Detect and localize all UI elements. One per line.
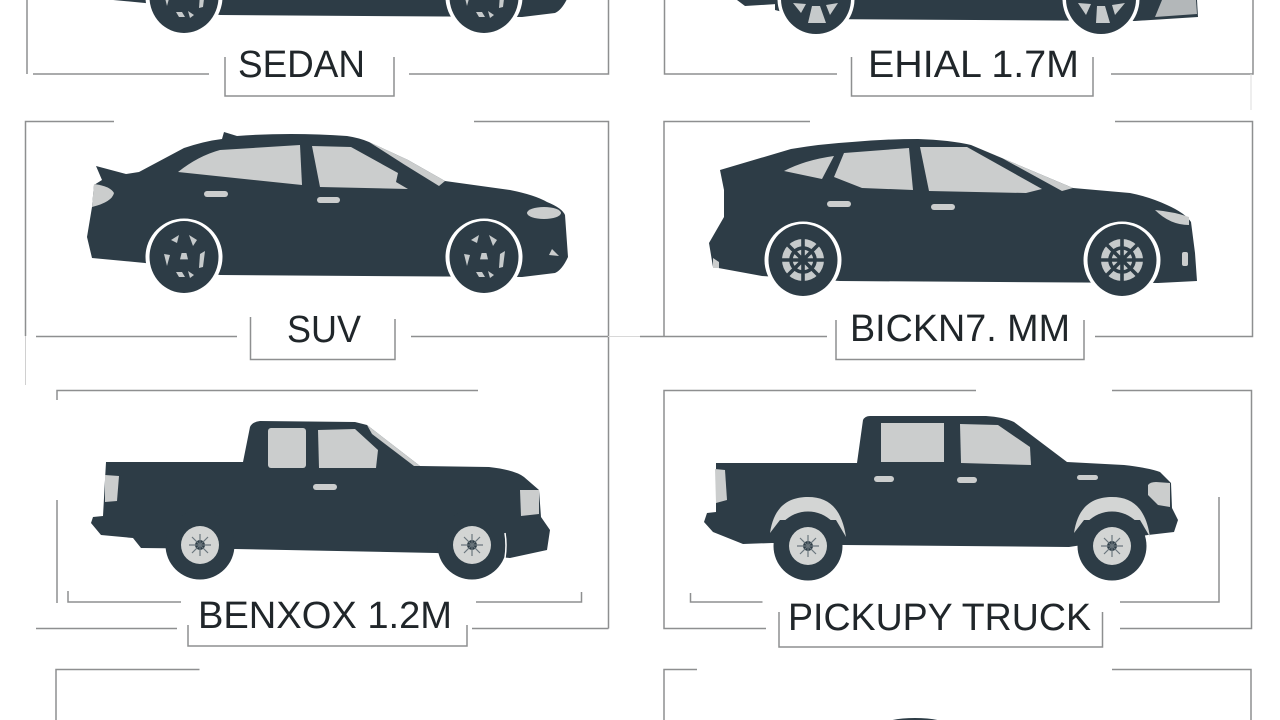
panel: bottom right cropped xyxy=(664,670,1251,720)
panel: crossover xyxy=(640,122,1252,360)
vehicle: crossover silhouette xyxy=(709,139,1197,298)
label box: crew cab pickup xyxy=(779,612,1102,647)
label: PICKUPY TRUCK: PICKUPY TRUCK xyxy=(788,597,1091,639)
vehicle: roof of cropped car xyxy=(883,718,947,720)
label box: crossover xyxy=(836,320,1084,360)
label box: sedan xyxy=(225,57,394,96)
panel: extended cab pickup xyxy=(36,390,608,646)
vehicle: partially cropped car xyxy=(737,0,1198,38)
label: SUV: SUV xyxy=(287,309,362,351)
label box: extended cab pickup xyxy=(188,625,467,646)
label box: coupe xyxy=(852,57,1093,96)
label: BICKN7. MM: BICKN7. MM xyxy=(850,308,1070,350)
panel: coupe xyxy=(664,0,1253,110)
label box: SUV xyxy=(250,317,395,360)
vehicle: extended cab pickup silhouette xyxy=(91,421,550,580)
panel: SUV xyxy=(26,122,664,628)
label: SEDAN: SEDAN xyxy=(238,44,365,86)
panel: bottom left cropped xyxy=(56,670,200,720)
panel: crew cab pickup xyxy=(664,390,1252,647)
label: EHIAL 1.7M: EHIAL 1.7M xyxy=(868,44,1079,86)
vehicle: SUV silhouette xyxy=(87,132,568,296)
vehicle: sedan silhouette xyxy=(87,0,568,36)
label: BENXOX 1.2M: BENXOX 1.2M xyxy=(198,595,452,637)
vehicle: crew cab pickup silhouette xyxy=(704,416,1178,580)
panel: sedan xyxy=(27,0,608,96)
